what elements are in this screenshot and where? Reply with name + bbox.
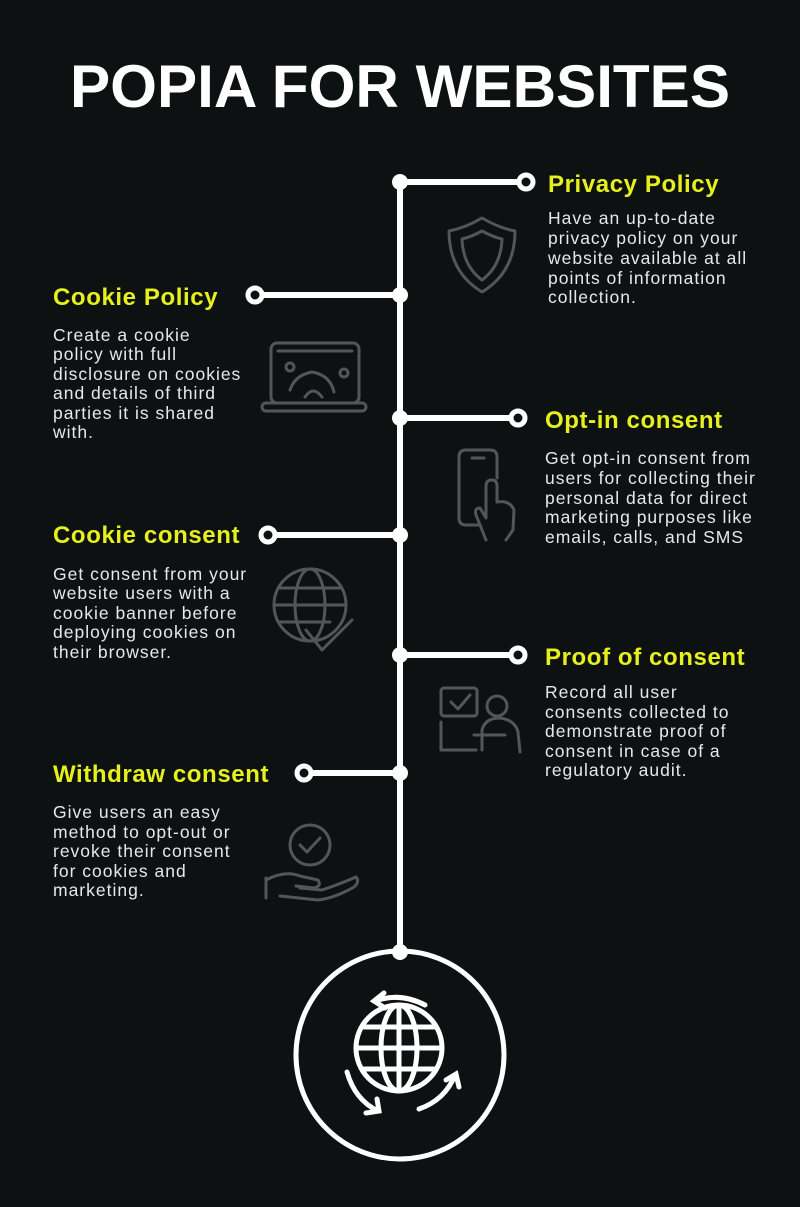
section: cookie consent: their browser. [53,642,172,662]
icon: globe with rotating arrows [347,993,459,1113]
section: proof of consent: consent in case of a [545,741,721,761]
section: withdraw consent: for cookies and [53,861,187,881]
branch: opt-in [392,410,525,426]
branch: proof [392,647,525,663]
branch: cookie policy [248,287,408,303]
section: privacy policy: points of information [548,268,727,288]
icon: globe check [274,569,352,650]
section: proof of consent: consents collected to [545,702,729,722]
section: cookie policy: disclosure on cookies [53,364,241,384]
section: proof of consent: demonstrate proof of [545,721,726,741]
icon: hand with check [266,825,358,900]
section: cookie policy: Create a cookie [53,325,191,345]
section: cookie consent [52,522,247,662]
section: cookie consent: cookie banner before [53,603,237,623]
section: cookie consent: deploying cookies on [53,622,236,642]
branch: cookie consent [261,527,408,543]
section: proof of consent [545,644,745,780]
section: privacy policy: collection. [548,287,637,307]
section: withdraw consent: method to opt-out or [53,822,231,842]
section: proof of consent: Record all user [545,682,678,702]
section: cookie policy: with. [52,422,94,442]
section: cookie policy: Cookie Policy [53,284,218,311]
end node [392,944,408,960]
section: cookie policy: and details of third [53,383,216,403]
icon: person with checklist [441,688,520,752]
branch: withdraw [297,765,408,781]
section: cookie consent: Cookie consent [53,522,240,549]
section: opt-in: Opt-in consent [545,407,723,434]
section: cookie policy: parties it is shared [53,403,215,423]
section: privacy policy: Privacy Policy [548,171,719,198]
section: privacy policy: privacy policy on your [548,228,738,248]
section: opt-in [545,407,756,547]
title: POPIA FOR WEBSITES [70,53,730,120]
section: privacy policy: website available at all [547,248,747,268]
section: proof of consent: Proof of consent [545,644,745,671]
section: withdraw consent: Give users an easy [53,802,221,822]
icon: laptop with gears [262,343,366,411]
section: privacy policy: Have an up-to-date [548,208,716,228]
section: withdraw consent [53,761,269,900]
section: cookie policy: policy with full [53,344,177,364]
timeline spine [296,182,504,1159]
branch: privacy policy [392,174,533,190]
section: withdraw consent: revoke their consent [53,841,231,861]
section: withdraw consent: Withdraw consent [53,761,269,788]
section: opt-in: Get opt-in consent from [545,448,751,468]
section: cookie policy [52,284,241,442]
section: cookie consent: website users with a [52,583,231,603]
icon: phone tap [459,450,514,540]
icon: shield [449,218,515,292]
section: opt-in: personal data for direct [545,488,748,508]
section: opt-in: emails, calls, and SMS [545,527,744,547]
section: opt-in: users for collecting their [545,468,756,488]
section: withdraw consent: marketing. [53,880,145,900]
section: proof of consent: regulatory audit. [545,760,688,780]
section: cookie consent: Get consent from your [53,564,247,584]
section: opt-in: marketing purposes like [545,507,753,527]
section: privacy policy [547,171,747,307]
